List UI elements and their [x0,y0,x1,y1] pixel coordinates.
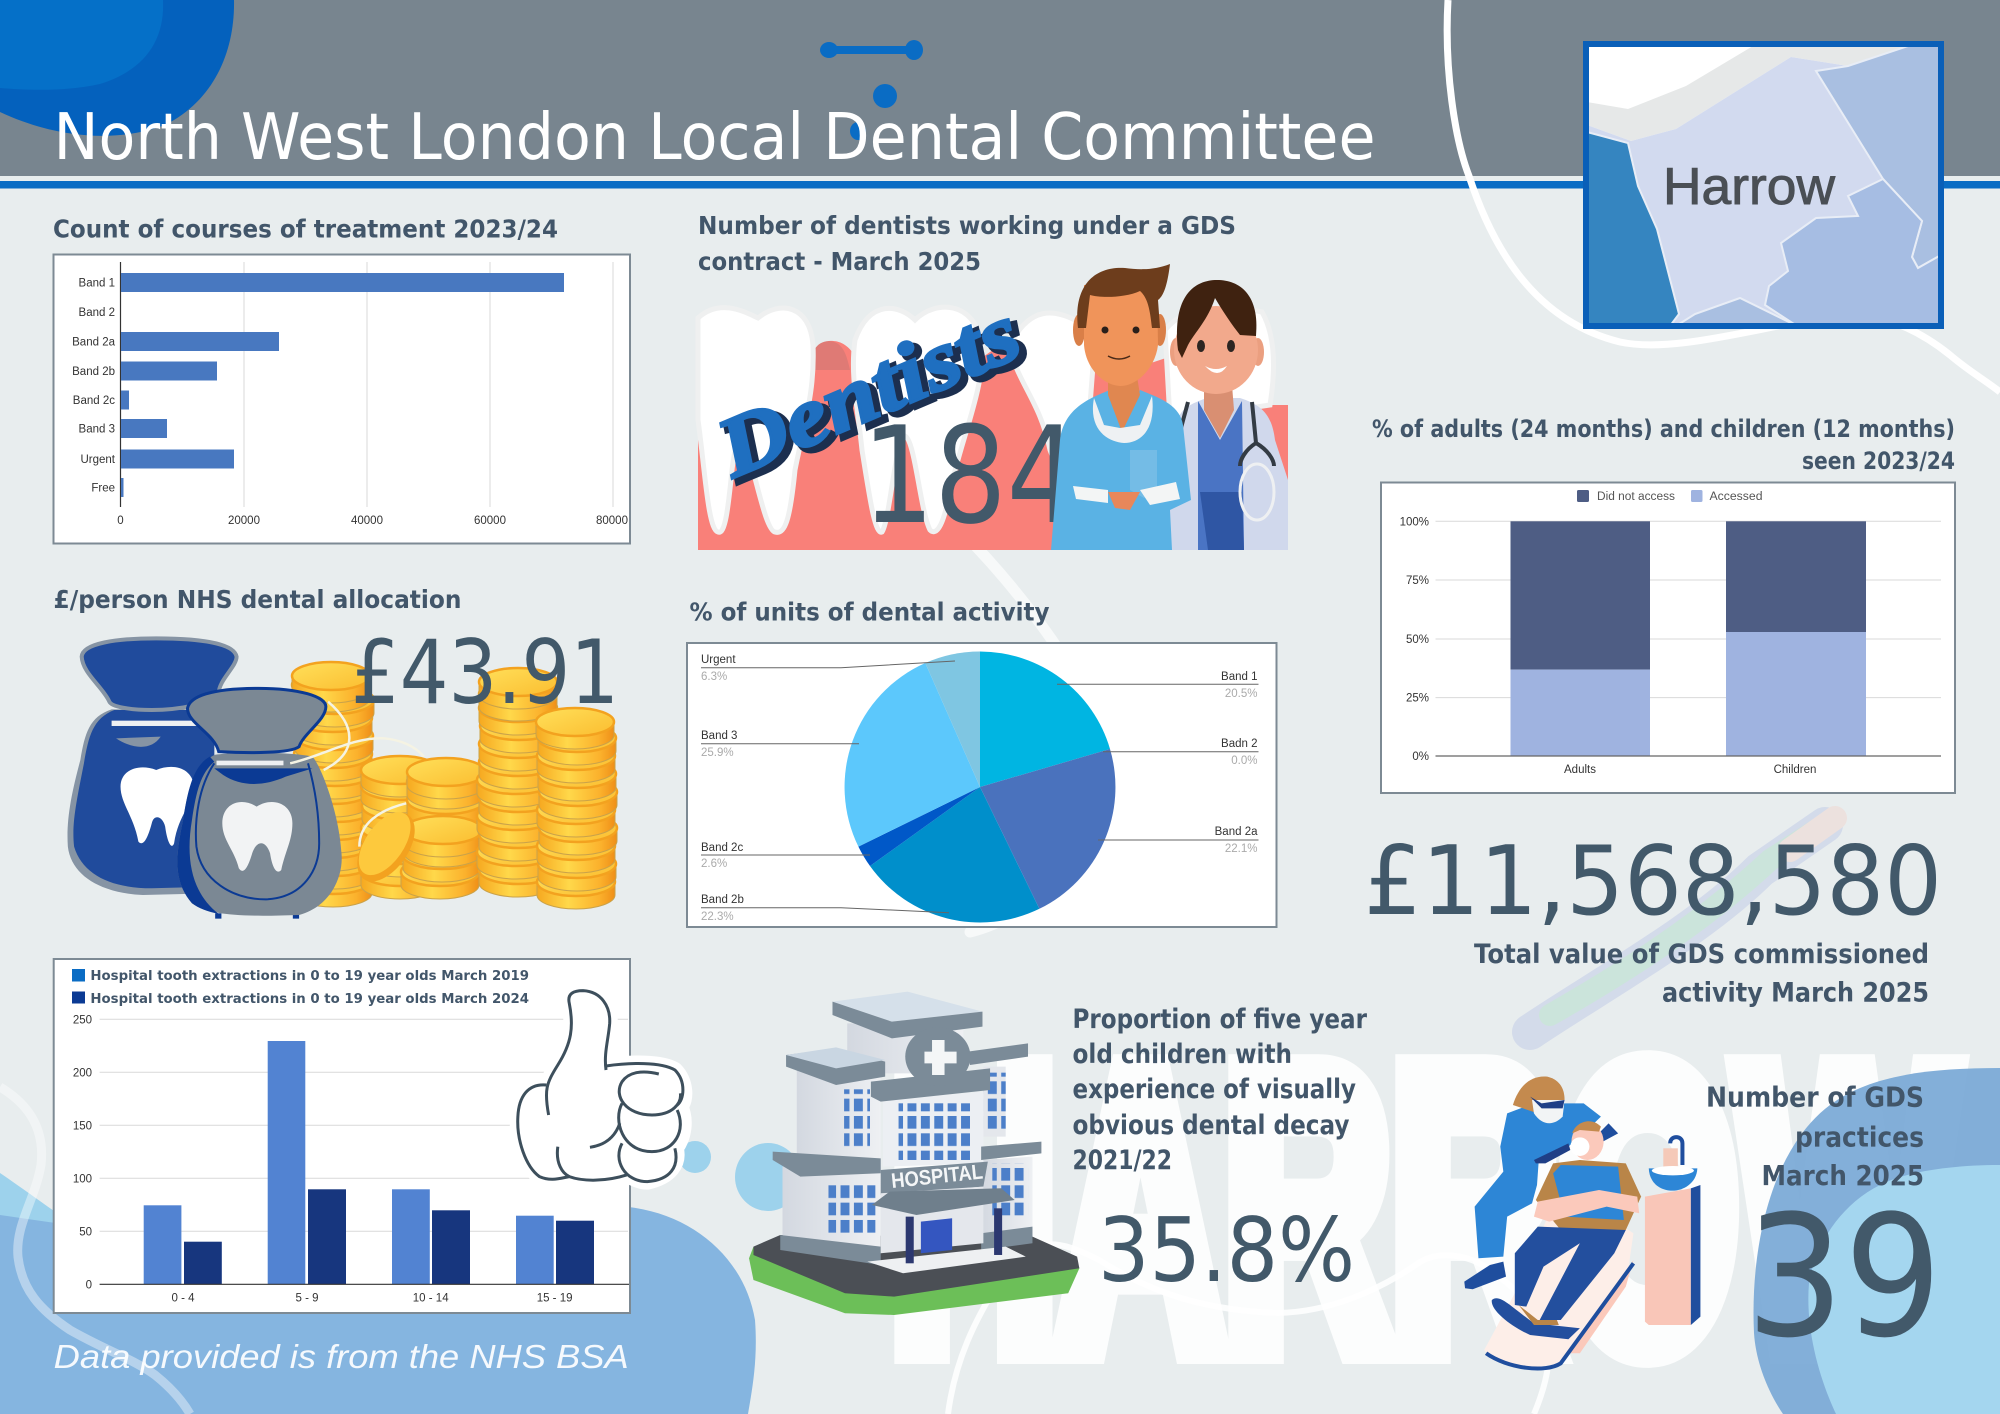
text: five year olds decay: Proportion of five year [1072,1004,1367,1035]
dentist figure [1464,1077,1618,1289]
text art: Dentists: Dentists [703,286,1033,496]
hospital sign: HOSPITAL [890,1160,984,1193]
illustration: hospital building [749,992,1079,1315]
stacked bar chart: adults and children seen: 0% [1412,751,1429,763]
bar chart: courses of treatment: 0 [117,515,124,527]
bar chart: hospital tooth extractions: 50 [79,1226,92,1238]
stacked bar chart: adults and children seen: 25% [1406,692,1429,704]
bar chart: hospital tooth extractions: 250 [73,1014,92,1026]
stat: total value: £11,568,580 [1364,827,1942,937]
bar chart: hospital tooth extractions: 200 [73,1068,92,1080]
text: five year olds decay: old children with [1072,1039,1292,1070]
stacked bar chart: adults and children seen: 100% [1400,516,1429,528]
text: total value caption: Total value of GDS commissioned [1474,939,1929,970]
bar chart: courses of treatment: Band 1 [79,278,115,290]
bar chart: courses of treatment: Band 2a [72,336,116,348]
bar chart: courses of treatment: 80000 [596,515,628,527]
icon: bone shape and dots [820,40,923,140]
decorative curve: left [0,1087,190,1414]
stacked bar chart: adults and children seen [1381,482,1955,793]
decorative blobs bottom right [1754,1068,2000,1414]
pie chart: units of dental activity: 25.9% [701,747,734,759]
pie chart: units of dental activity: Band 2c [701,842,743,854]
legend [72,968,529,1007]
pie chart: units of dental activity: Urgent [701,654,736,666]
stat: 35.8%: 35.8% [1098,1199,1355,1302]
blue floss box [68,638,237,895]
stacked bar chart: adults and children seen: 50% [1406,634,1429,646]
text: total value caption [1474,939,1929,1008]
pie chart: units of dental activity: 22.3% [701,911,734,923]
pie chart: units of dental activity: 0.0% [1231,755,1258,767]
pie chart: units of dental activity: Band 1 [1221,671,1258,683]
header blobs [0,0,234,136]
chair edge [1486,1263,1633,1368]
illustration: stacks of gold coins [292,662,617,909]
text: data source: Data provided is from the NHS BSA [54,1338,629,1375]
woman dentist [1163,280,1288,550]
illustration: teeth and gums [698,307,1288,550]
bar chart: courses of treatment [54,254,630,544]
heading: allocation: £/person NHS dental allocation [54,585,462,614]
illustration: floss containers [68,638,424,919]
bar chart: hospital tooth extractions: 0 - 4 [171,1292,195,1304]
stacked bar chart: adults and children seen: 75% [1406,575,1429,587]
bar chart: hospital tooth extractions [54,959,630,1313]
patient figure [1492,1121,1641,1339]
bar chart: hospital tooth extractions: 5 - 9 [295,1292,319,1304]
pie chart: units of dental activity [687,643,1276,927]
heading: number of dentists: Number of dentists working under a GDS [698,211,1236,240]
bar chart: hospital tooth extractions: 100 [73,1174,92,1186]
bar chart: hospital tooth extractions: 15 - 19 [537,1292,573,1304]
stacked bar chart: adults and children seen: Children [1774,764,1816,776]
legend [1577,490,1762,503]
bar chart: courses of treatment: 20000 [228,515,260,527]
pie chart: units of dental activity: 20.5% [1225,688,1258,700]
bar chart: courses of treatment: Band 2 [79,307,115,319]
bar chart: courses of treatment: Urgent [80,454,116,466]
toothbrush faint background [1530,818,1835,1032]
grey floss box [177,688,342,919]
dental chair [1484,1187,1633,1368]
text: five year olds decay: experience of visually [1072,1074,1356,1105]
bar chart: courses of treatment: 40000 [351,515,383,527]
decorative curve: middle [960,530,1107,932]
spittoon cabinet [1645,1137,1700,1325]
bar chart: courses of treatment: Band 3 [79,424,115,436]
text: number of GDS practices: practices [1795,1122,1924,1154]
bar chart: hospital tooth extractions: 0 [86,1280,92,1292]
text: five year olds decay: obvious dental decay [1072,1110,1350,1141]
pie chart: units of dental activity: Band 3 [701,730,737,742]
pie chart: units of dental activity: 2.6% [701,858,727,870]
text: number of GDS practices: Number of GDS [1706,1082,1924,1114]
pie chart: units of dental activity: 6.3% [701,671,727,683]
pie chart: units of dental activity: 22.1% [1225,843,1258,855]
legend: Hospital tooth extractions in 0 to 19 year olds March 2024 [90,991,529,1007]
text: total value caption: activity March 2025 [1662,978,1929,1008]
pie chart: units of dental activity: Band 2b [701,894,744,906]
decorative blobs bottom left [0,1141,801,1414]
decorative curve: bottom centre [948,1244,1549,1414]
floss thread [290,702,424,847]
legend: Hospital tooth extractions in 0 to 19 year olds March 2019 [90,968,529,984]
heading: courses of treatment: Count of courses of treatment 2023/24 [53,214,558,244]
map panel: Harrow [1583,41,1944,329]
stat: 184: 184 [862,398,1079,554]
legend: Did not access [1597,491,1675,503]
illustration: two dentists [1051,264,1288,550]
bar chart: hospital tooth extractions: 10 - 14 [413,1292,449,1304]
decorative curve: right [1447,0,2000,392]
heading: number of dentists: contract - March 2025 [698,247,981,276]
bar chart: courses of treatment: 60000 [474,515,506,527]
bar chart: courses of treatment: Band 2c [73,395,115,407]
heading: adults and children seen [1372,415,1955,475]
legend: Accessed [1710,491,1762,503]
heading: adults and children seen: seen 2023/24 [1802,447,1955,475]
text art: Dentists: Dentists [709,290,1039,500]
stat: 39: 39 [1746,1179,1942,1375]
map label: Harrow [1663,158,1835,216]
heading: number of dentists [698,211,1236,276]
pie chart: units of dental activity: Badn 2 [1221,738,1258,750]
man dentist [1051,264,1191,550]
bar chart: hospital tooth extractions: 150 [73,1120,92,1132]
stacked bar chart: adults and children seen: Adults [1564,764,1596,776]
text: five year olds decay: 2021/22 [1072,1145,1172,1176]
icon: thumbs up [518,991,684,1182]
bar chart: courses of treatment: Free [91,482,115,494]
illustration: dentist treating patient [1464,1077,1700,1368]
text: five year olds decay [1072,1004,1367,1176]
heading: units of dental activity: % of units of dental activity [690,598,1050,626]
text: number of GDS practices: March 2025 [1762,1160,1924,1192]
header band [0,0,2000,188]
pie chart: units of dental activity: Band 2a [1215,826,1258,838]
title: North West London Local Dental Committee [54,101,1376,175]
bar chart: courses of treatment: Band 2b [72,366,115,378]
text: number of GDS practices [1706,1082,1924,1192]
stat: £43.91: £43.91 [351,621,619,724]
